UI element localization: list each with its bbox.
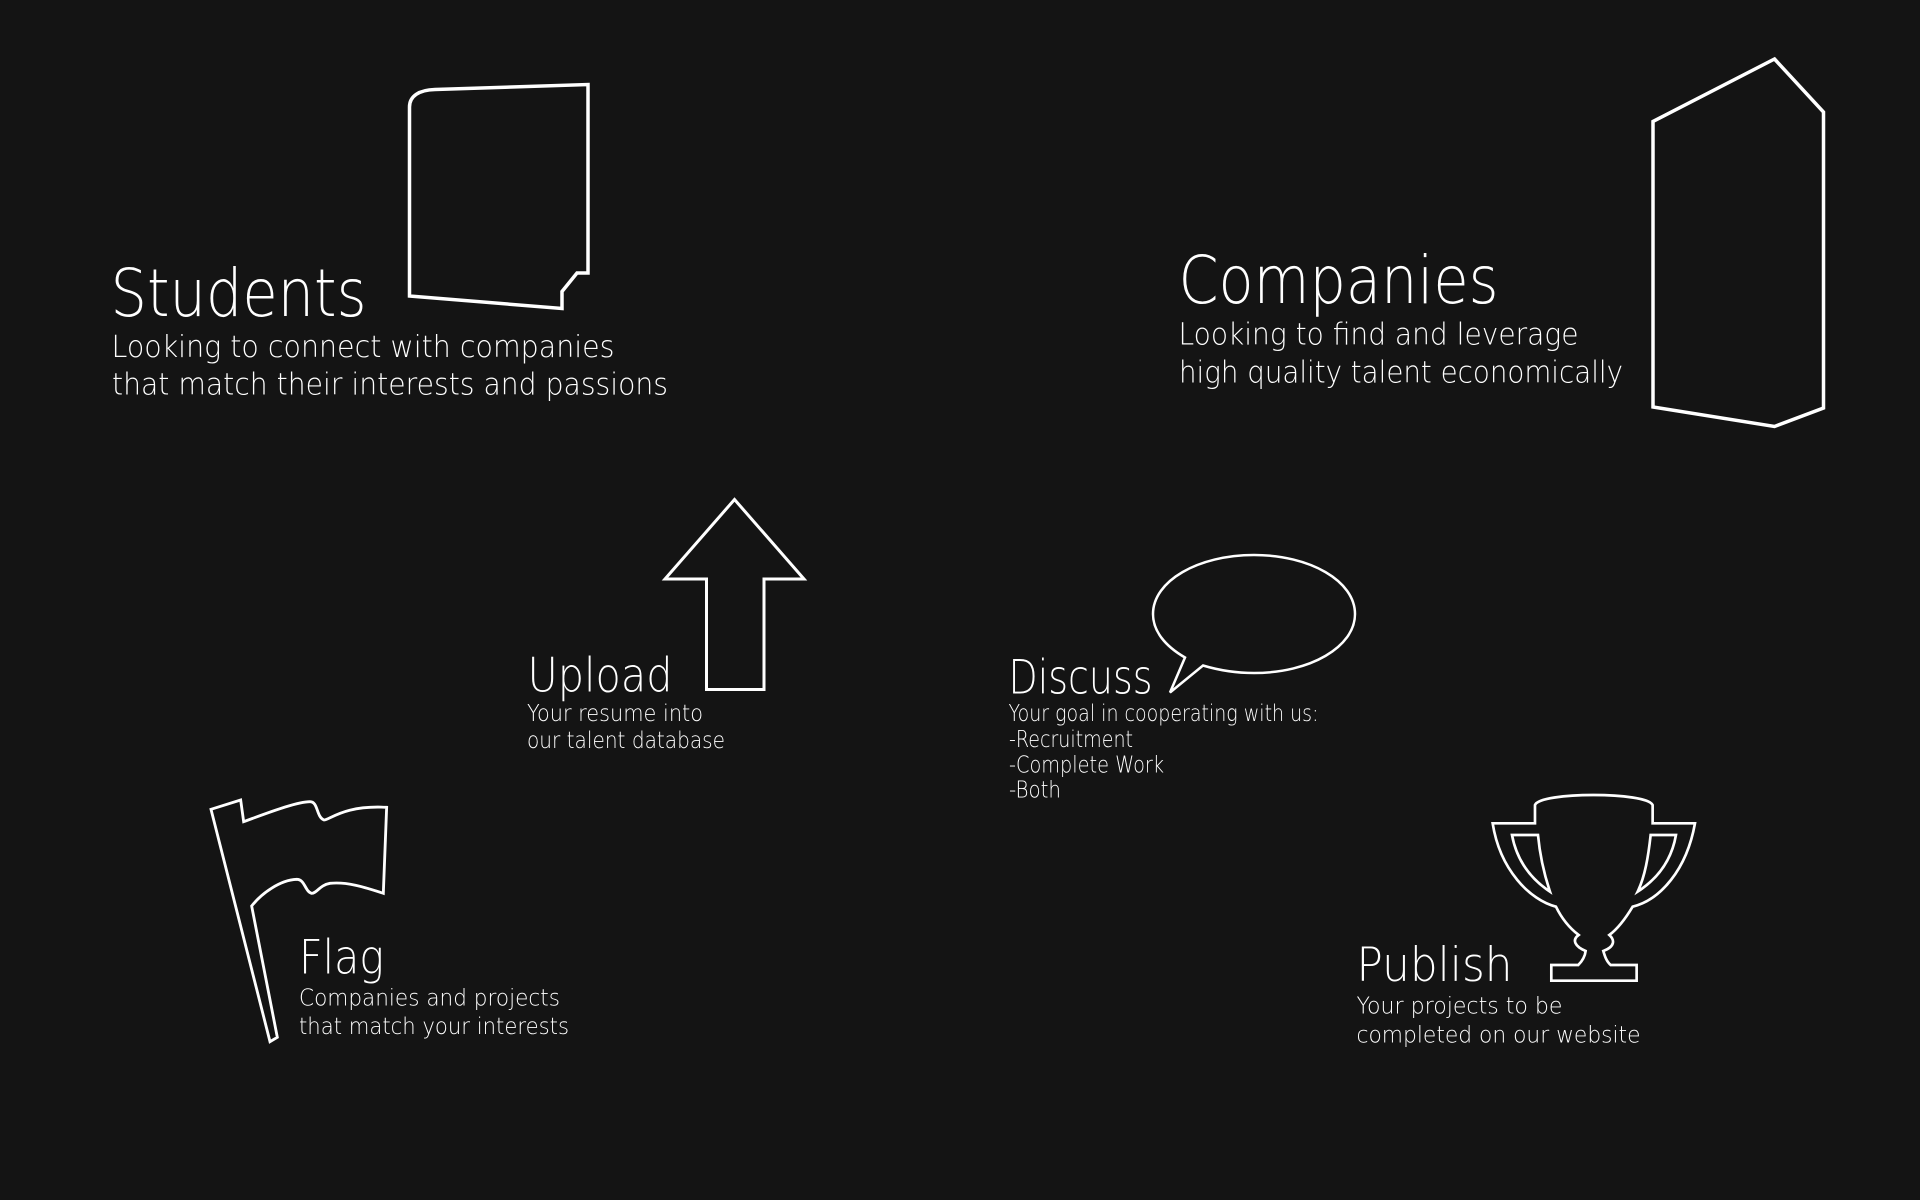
icon: speech bubble — [1153, 555, 1355, 692]
text: companies description: high quality talent economically — [1179, 356, 1623, 390]
text: discuss description: -Complete Work — [1009, 752, 1164, 778]
text: flag description — [299, 986, 569, 1040]
panel: companies — [1178, 59, 1824, 426]
heading: upload: Upload — [528, 648, 672, 704]
text: students description — [112, 330, 668, 402]
panel: flag — [211, 800, 569, 1042]
text: publish description: completed on our website — [1356, 1022, 1640, 1048]
heading: students: Students — [110, 255, 366, 332]
text: upload description: Your resume into — [527, 701, 703, 727]
heading: publish: Publish — [1356, 938, 1512, 993]
text: discuss description: -Both — [1009, 778, 1061, 804]
icon: flag — [211, 800, 387, 1042]
text: companies description — [1178, 318, 1623, 390]
text: flag description: Companies and projects — [299, 986, 560, 1012]
heading: flag: Flag — [299, 930, 384, 986]
panel: discuss — [1008, 555, 1355, 804]
text: discuss description: Your goal in cooperating with us: — [1008, 701, 1318, 727]
heading: discuss: Discuss — [1008, 650, 1152, 706]
icon: building outline — [1653, 59, 1824, 426]
panel: students — [110, 84, 668, 402]
text: companies description: Looking to find and leverage — [1178, 318, 1578, 352]
icon: upload arrow — [665, 500, 804, 690]
text: publish description — [1356, 994, 1640, 1048]
icon: trophy — [1493, 795, 1695, 981]
panel: upload — [527, 500, 804, 754]
text: upload description — [527, 701, 725, 754]
panel: publish — [1356, 795, 1695, 1048]
text: publish description: Your projects to be — [1356, 994, 1562, 1020]
text: students description: that match their interests and passions — [112, 368, 668, 402]
text: upload description: our talent database — [527, 728, 725, 754]
text: discuss description — [1008, 701, 1318, 804]
text: students description: Looking to connect with companies — [112, 330, 614, 365]
heading: companies: Companies — [1178, 242, 1498, 319]
text: discuss description: -Recruitment — [1009, 727, 1133, 753]
text: flag description: that match your interests — [299, 1014, 569, 1040]
icon: student outline — [410, 84, 588, 308]
